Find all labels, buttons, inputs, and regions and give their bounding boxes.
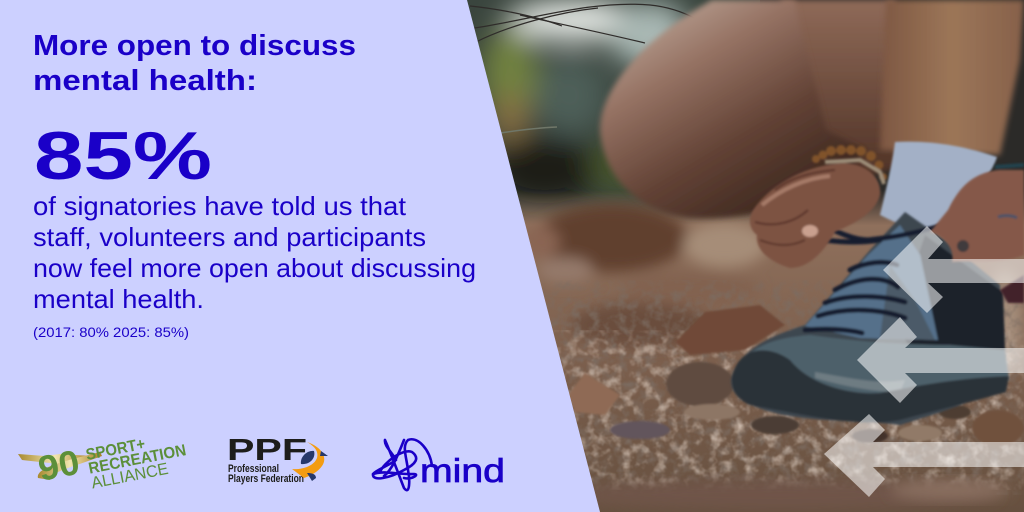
lilac text panel (0, 0, 600, 512)
body text (33, 191, 476, 314)
right hand pulling lace (930, 165, 1024, 303)
legs (600, 0, 1024, 218)
body text: now feel more open about discussing (33, 253, 476, 283)
blurred foreground (610, 474, 898, 504)
big statistic: 85% (34, 118, 212, 194)
base backdrop (760, 0, 1024, 224)
heading (33, 30, 356, 97)
arrow 3 (824, 414, 1024, 497)
heading: More open to discuss (33, 30, 356, 62)
body text: mental health. (33, 284, 204, 314)
left hand holding lace (750, 145, 887, 268)
logo: Professional Players Federation: Professional (228, 463, 279, 475)
orange arc (292, 442, 324, 478)
logo: Sport + Recreation Alliance (18, 428, 190, 492)
shoe (731, 212, 1009, 425)
navy leaf (301, 451, 328, 481)
arrow 1 (883, 226, 1024, 313)
logo: Sport + Recreation Alliance: ALLIANCE (90, 460, 170, 492)
ground and rocks (518, 192, 1024, 512)
logo: Professional Players Federation: PPF (227, 432, 307, 467)
body text: staff, volunteers and participants (33, 222, 426, 252)
blurred foliage background (467, 0, 760, 210)
larger rocks (568, 305, 1024, 446)
footnote: (2017: 80% 2025: 85%) (33, 324, 189, 340)
body text: of signatories have told us that (33, 191, 407, 221)
arrows overlay (824, 226, 1024, 497)
scribble star mark (373, 439, 432, 490)
logo: Mind: mind (420, 452, 505, 489)
logo: Sport + Recreation Alliance: RECREATION (87, 442, 188, 478)
gravel texture (540, 280, 1024, 495)
arrow 2 (857, 317, 1024, 403)
logo: Professional Players Federation: Players Federation (228, 473, 304, 485)
logo: Sport + Recreation Alliance: 90 (35, 443, 83, 489)
wooden bead bracelet (812, 145, 887, 184)
heading: mental health: (33, 65, 257, 97)
logo: Mind (373, 439, 505, 490)
bare twigs (470, 4, 696, 133)
logo: Sport + Recreation Alliance: SPORT+ (85, 436, 147, 464)
logo: Professional Players Federation (227, 432, 328, 485)
photo: person tying hiking shoe on rocky trail (460, 0, 1024, 512)
shoe laces (805, 218, 948, 333)
sock (880, 142, 997, 232)
